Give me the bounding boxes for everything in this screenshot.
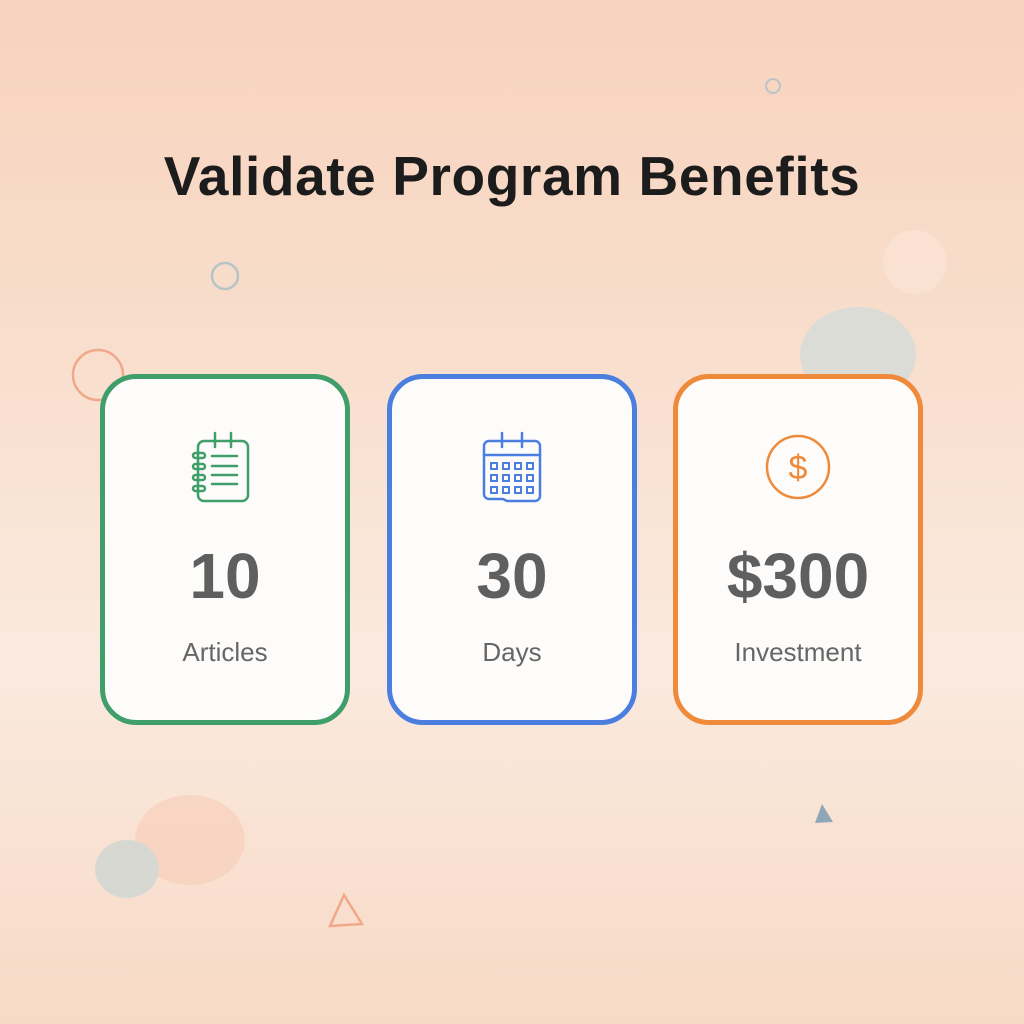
stat number: 30: [476, 540, 548, 612]
label: Articles: [182, 637, 268, 667]
stat number: 10: [189, 540, 261, 612]
stat number: $300: [727, 540, 869, 612]
label: Investment: [734, 637, 862, 667]
icon: dollar coin: [766, 434, 830, 500]
panel: articles: [100, 374, 350, 725]
panel: days: [387, 374, 637, 725]
icon: notebook: [192, 432, 250, 502]
title: Validate Program Benefits: [164, 145, 860, 207]
icon: dollar coin: $: [789, 449, 808, 487]
label: Days: [482, 637, 542, 667]
icon: calendar: [482, 432, 542, 502]
panel: investment: [673, 374, 923, 725]
